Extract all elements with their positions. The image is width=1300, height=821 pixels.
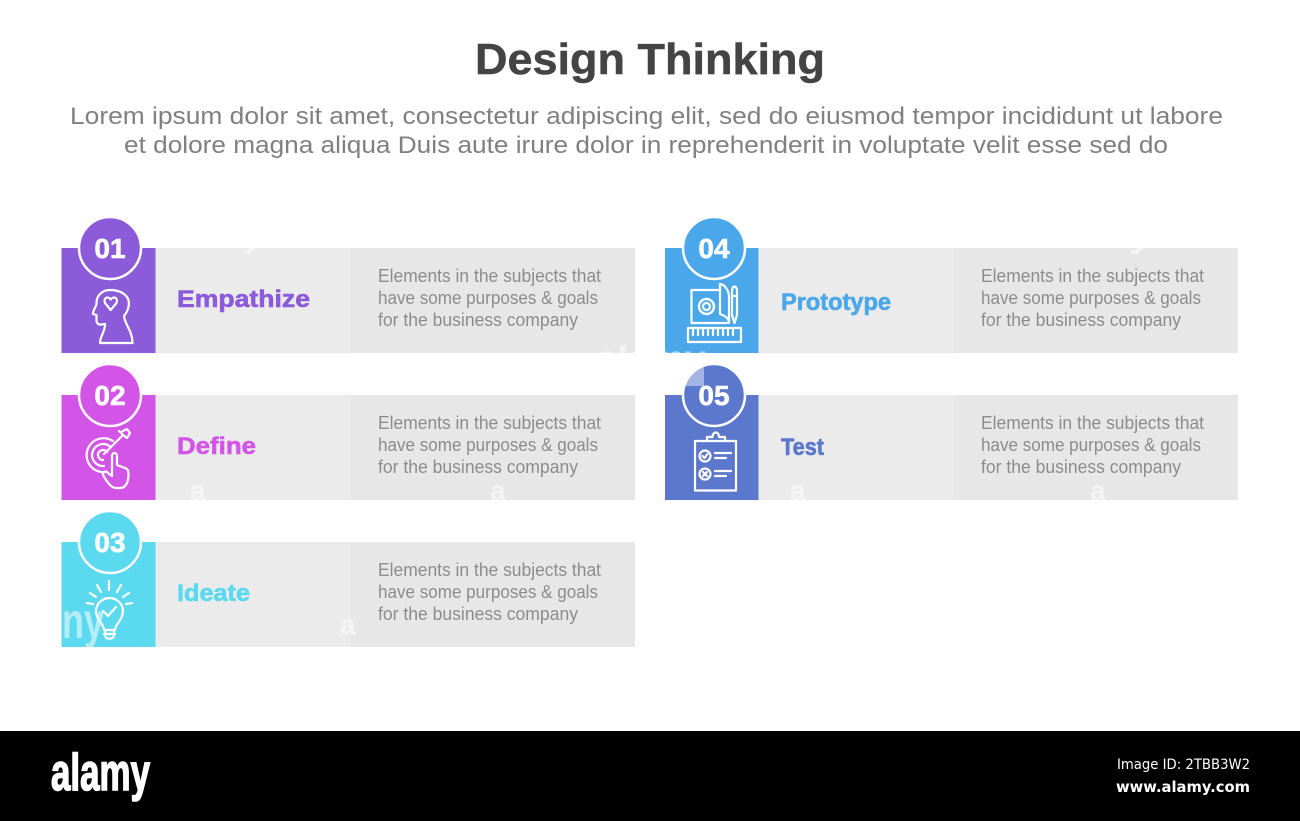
description: Elements in the subjects that	[981, 413, 1204, 433]
panel: 02 Define	[62, 364, 635, 506]
icon: target with arrow and hand	[87, 429, 130, 488]
website: www.alamy.com	[1116, 778, 1250, 796]
panel: 01 Empathize	[62, 217, 635, 371]
panel: 05 Test: a	[1090, 475, 1106, 506]
label: Test: Test	[781, 434, 824, 461]
footer bar	[0, 731, 1300, 821]
panel: 05 Test	[665, 364, 1238, 506]
description: have some purposes & goals	[981, 435, 1201, 455]
description: for the business company	[378, 457, 578, 477]
description	[981, 266, 1204, 330]
panel: 03 Ideate: a	[340, 609, 356, 640]
panel: 05 Test: 05	[698, 380, 730, 411]
icon: light bulb with check	[87, 581, 132, 639]
description	[981, 413, 1204, 477]
panel: 03 Ideate: 03	[94, 527, 126, 558]
description: for the business company	[378, 310, 578, 330]
icon: blueprint with gear, pencil and ruler	[688, 284, 741, 342]
image id: Image ID: 2TBB3W2	[1117, 757, 1250, 773]
description: have some purposes & goals	[378, 435, 598, 455]
panel: 04 Prototype: alamy	[596, 341, 706, 374]
description: for the business company	[981, 457, 1181, 477]
label: Prototype: Prototype	[781, 289, 891, 316]
description	[378, 413, 601, 477]
description: Elements in the subjects that	[378, 266, 601, 286]
description: Elements in the subjects that	[981, 266, 1204, 286]
panel: 03 Ideate: ny	[62, 593, 104, 649]
panel: 01 Empathize: a	[341, 346, 354, 371]
subtitle text block	[70, 103, 1223, 159]
description: Elements in the subjects that	[378, 560, 601, 580]
label: Empathize: Empathize	[177, 286, 310, 313]
panel: 05 Test: a	[790, 475, 806, 506]
description: have some purposes & goals	[378, 288, 598, 308]
description	[378, 560, 601, 624]
panel: 04 Prototype: a	[941, 346, 954, 371]
description: Elements in the subjects that	[378, 413, 601, 433]
panel: 01 Empathize: alamy	[175, 222, 260, 255]
description: for the business company	[378, 604, 578, 624]
description: for the business company	[981, 310, 1181, 330]
panel: 01 Empathize: 01	[94, 233, 126, 264]
panel: 04 Prototype: 04	[698, 233, 730, 264]
panel: 02 Define: a	[490, 475, 506, 506]
label: Define: Define	[177, 433, 256, 460]
panel: 03 Ideate	[62, 511, 635, 649]
subtitle text block: Lorem ipsum dolor sit amet, consectetur adipiscing elit, sed do eiusmod tempor incididunt ut labore	[70, 103, 1223, 130]
footer logo: alamy	[51, 744, 150, 802]
panel: 04 Prototype: alamy	[1045, 222, 1150, 255]
panel: 04 Prototype	[596, 217, 1238, 374]
description: have some purposes & goals	[378, 582, 598, 602]
icon: clipboard checklist	[695, 432, 736, 490]
subtitle text block: et dolore magna aliqua Duis aute irure dolor in reprehenderit in voluptate velit esse sed do	[124, 132, 1168, 159]
description: have some purposes & goals	[981, 288, 1201, 308]
title: Design Thinking	[475, 35, 825, 84]
label: Ideate: Ideate	[177, 580, 250, 607]
icon: head with heart	[93, 290, 132, 343]
panel: 02 Define: a	[190, 475, 206, 506]
description	[378, 266, 601, 330]
panel: 02 Define: 02	[94, 380, 126, 411]
